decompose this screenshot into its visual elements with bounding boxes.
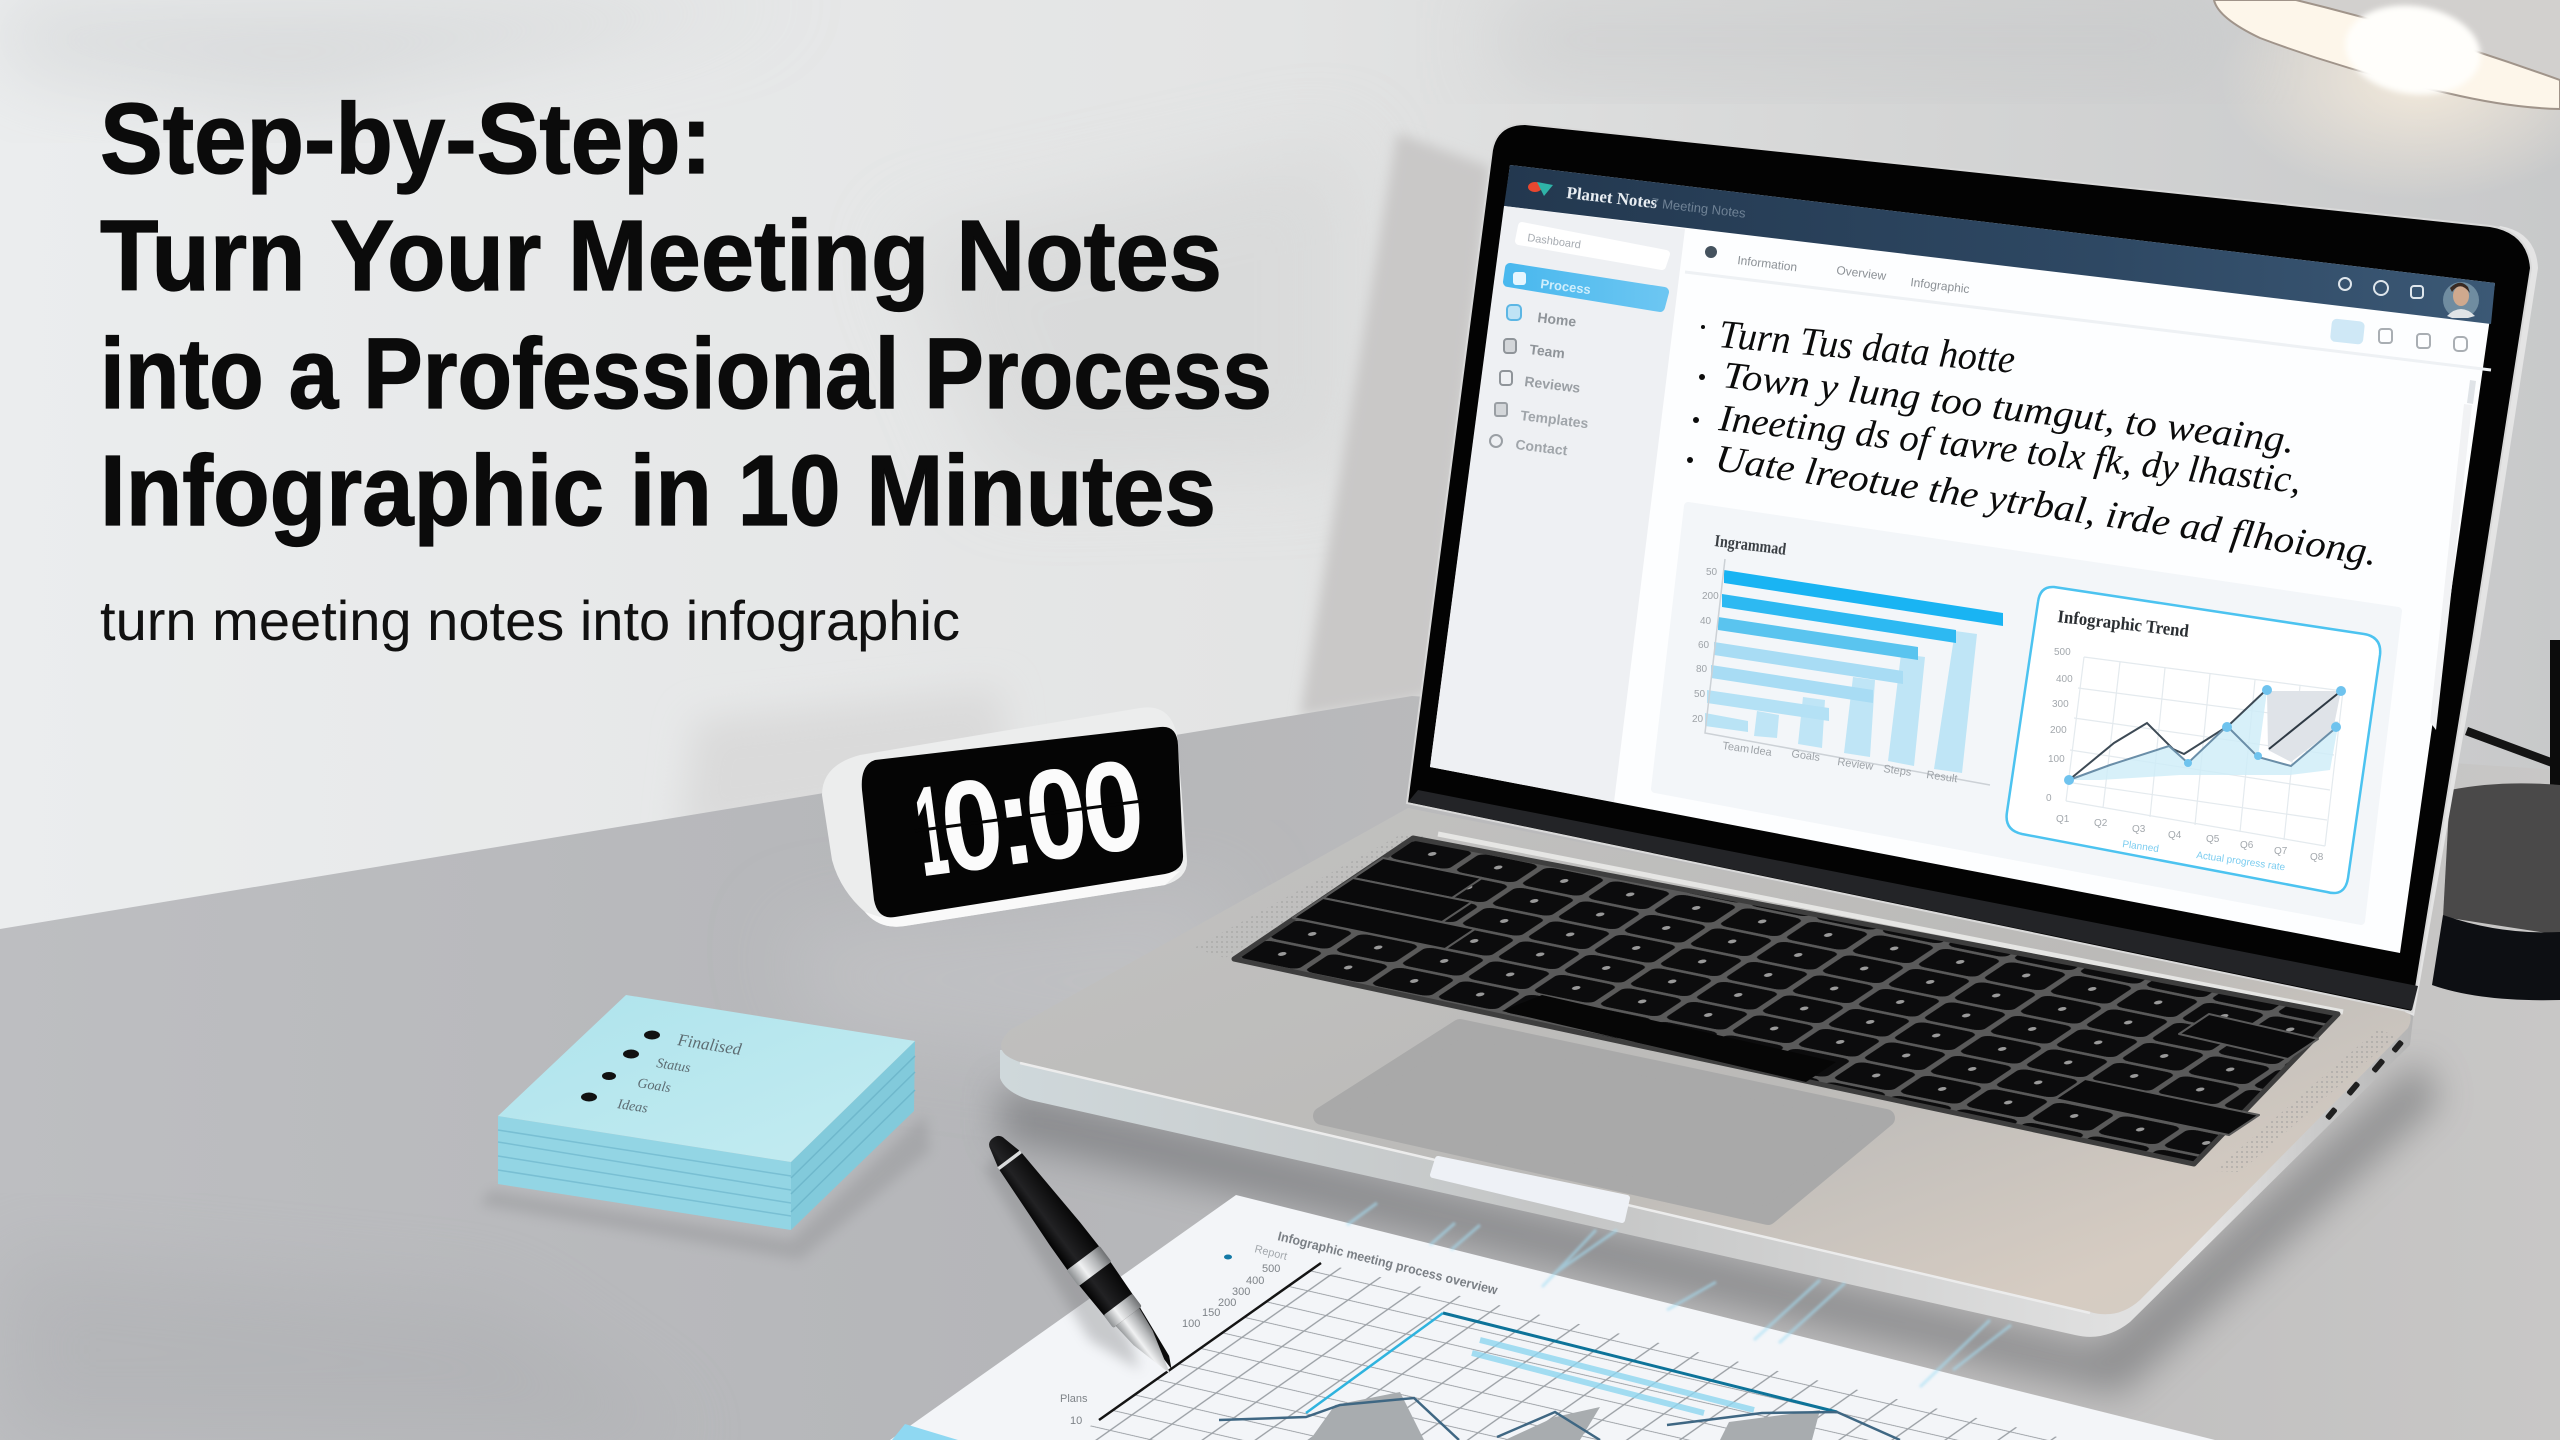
dark line series [2069,691,2265,780]
horizontal bars [1724,570,2003,626]
toolbar: Infographic [1910,275,1970,296]
stack right side [791,1041,915,1230]
title [100,83,1272,547]
chart axis labels [2046,647,2324,863]
data points [2064,685,2346,785]
user avatar [2443,282,2479,318]
top sheet [498,995,915,1162]
handwritten notes: Town y lung too tumgut, to weaing. [1721,354,2297,462]
center band [1067,1246,1111,1286]
laptop base [1000,808,2414,1337]
laptop shadow on wall [1300,133,1490,716]
barrel [977,1126,1143,1329]
chart axis labels: 400 [2056,674,2073,685]
screen [1430,165,2495,953]
menu: home: Home [1537,309,1577,330]
x axis labels: Steps [1883,763,1913,779]
chart legend: Planned [2122,839,2159,855]
chart axis labels: Q5 [2206,834,2220,845]
handwritten notes: Turn Tus data hotte [1717,311,2017,382]
fountain pen [977,1126,1187,1386]
segment gaps [915,801,1143,831]
cap ring [997,1150,1022,1170]
chart legend [2122,839,2286,873]
silver edge [2405,226,2538,1016]
speaker grill right [2214,1029,2396,1172]
subtitle: turn meeting notes into infographic [100,589,960,652]
laptop shadow on desk [1000,1060,2440,1395]
axis labels: Plans [1060,1393,1088,1405]
report card [1655,506,2398,921]
scrollbar [2467,380,2476,404]
chart axis labels: 300 [2052,699,2069,710]
shade opening [2214,0,2560,109]
x axis labels: Result [1926,769,1958,785]
chart axis labels: 100 [2048,754,2065,765]
desk lamp shade [2213,0,2560,174]
clock shadow on wall [680,688,1010,840]
grid [2066,657,2343,846]
chart axis labels: Q4 [2168,830,2182,841]
sidebar [1430,206,1685,802]
stack left side [498,1116,791,1230]
note text: Goals [636,1076,672,1096]
digital clock [822,707,1187,927]
pen shadow [985,1150,1140,1370]
axis labels: 400 [1246,1275,1264,1287]
front notch [1433,1159,1627,1220]
chart axis labels: Q7 [2274,846,2288,857]
handwritten notes: Ineeting ds of tavre tolx fk, dy lhastic, [1716,397,2303,502]
shade body [2444,0,2560,69]
nav icons [2339,278,2423,298]
menu: contact [1490,435,1569,458]
toolbar [1685,246,2491,730]
chart axis labels: 0 [2046,793,2052,804]
axes [1705,559,1990,785]
toolbar: Information [1737,253,1798,274]
line chart card [2007,587,2380,893]
laptop lid [1407,124,2538,1016]
note text: Ideas [615,1097,649,1117]
nib [1114,1307,1182,1383]
base top surface [1001,808,2411,1314]
toolbar: Overview [1836,263,1887,283]
x axis labels [1722,740,1958,785]
active menu item [1508,268,1664,307]
axis labels: 200 [1218,1297,1236,1309]
menu: reviews [1500,371,1581,396]
axis labels: 10 [1070,1415,1082,1427]
chart axis labels: 200 [2050,725,2067,736]
clock time: 0:00 [933,732,1152,901]
y axis labels: 50 [1694,689,1706,700]
app breadcrumb: 7 Meeting Notes [1651,195,1747,221]
y axis labels: 50 [1706,567,1718,578]
sticky notes [480,995,930,1260]
glow on wall [2264,46,2560,174]
bar chart [1692,531,2003,785]
dark teal line [1443,1313,1837,1412]
nib ring [1103,1294,1142,1328]
clock time: 1 [908,758,955,904]
nib feed [1129,1306,1181,1369]
navigation bar [1504,165,2495,324]
space bar [1502,995,1836,1082]
x axis labels: Review [1837,756,1874,773]
note text: Status [655,1056,692,1076]
front lip highlight [1020,1063,2090,1313]
menu: templates [1495,403,1589,431]
modifier keys [1293,858,2318,1135]
keyboard highlight strip [1438,834,2343,1012]
menu: templates: Templates [1520,407,1589,431]
grey chart forms [1310,1392,1820,1440]
title: into a Professional Process [100,318,1272,430]
chart axis labels: Q8 [2310,852,2324,863]
lid bezel [1407,124,2531,1012]
cyan vertical line [1306,1313,1443,1413]
paper chart sheet [890,1195,2215,1440]
speaker grill left [1194,836,1425,958]
paper bullet [1224,1254,1232,1260]
menu: team: Team [1529,341,1566,361]
axis labels: 150 [1202,1307,1220,1319]
x axis labels: Goals [1791,748,1821,764]
lower bezel band [1408,790,2418,1010]
side ports [2325,1039,2404,1121]
menu: home [1507,305,1577,330]
y axis labels: 200 [1702,591,1719,602]
note text: Finalised [675,1030,743,1059]
sidebar: Process [1540,276,1592,297]
desk lamp base [2432,640,2560,1000]
wall background [0,0,2560,1000]
title: Turn Your Meeting Notes [100,200,1222,312]
graph y axis [1099,1263,1321,1420]
graph grid [1090,1268,2057,1440]
x axis labels: Team [1722,740,1750,756]
vertical bars [1754,631,1977,773]
axis labels: 100 [1182,1318,1200,1330]
line chart title: Infographic Trend [2057,606,2190,641]
paper chart sheet: Report [1253,1243,1288,1263]
chart axis labels: Q6 [2240,840,2254,851]
y axis labels: 80 [1696,664,1708,675]
axis labels: 500 [1262,1263,1280,1275]
menu: team [1504,339,1566,361]
title: Step-by-Step: [100,83,712,195]
menu: reviews: Reviews [1524,373,1581,396]
chart axis labels: Q3 [2132,824,2146,835]
bar chart title: Ingrammad [1714,531,1788,559]
chart axis labels: Q1 [2056,814,2070,825]
y axis labels: 60 [1698,640,1710,651]
light rays [1347,1203,2011,1387]
blue line series [2069,726,2338,780]
y axis labels: 40 [1700,616,1712,627]
chart axis labels: Q2 [2094,818,2108,829]
x axis labels: Idea [1750,744,1773,759]
light cyan bands [1472,1340,1754,1413]
axis labels: 300 [1232,1286,1250,1298]
search box [1519,226,1666,266]
keyboard [1234,838,2338,1164]
tool buttons [2330,318,2467,351]
app logo [1528,182,1553,196]
chart area fills [2069,691,2338,780]
trackpad [1322,1028,1886,1216]
note bullets [581,1030,660,1102]
chart legend: Actual progress rate [2196,850,2286,873]
cyan corner strip [892,1424,958,1440]
handwritten notes: Uate lreotue the ytrbal, irde ad flhoiong. [1713,437,2380,574]
app name: Planet Notes [1566,183,1659,212]
base front edge [1000,1010,2414,1337]
dark blue trend line [1219,1398,1459,1440]
desk surface [0,696,2560,1440]
menu: contact: Contact [1515,436,1569,458]
handwritten notes [1687,311,2380,574]
chart axis labels: 500 [2054,647,2071,658]
sidebar: Dashboard [1527,232,1582,251]
y axis labels: 20 [1692,714,1704,725]
clock screen [862,727,1183,917]
axis labels [1060,1263,1280,1427]
title: Infographic in 10 Minutes [100,435,1216,547]
y axis labels [1692,567,1719,725]
bulb [2346,3,2484,96]
paper heading: Infographic meeting process overview [1276,1228,1500,1298]
note text [615,1030,743,1117]
clock body [822,707,1187,927]
